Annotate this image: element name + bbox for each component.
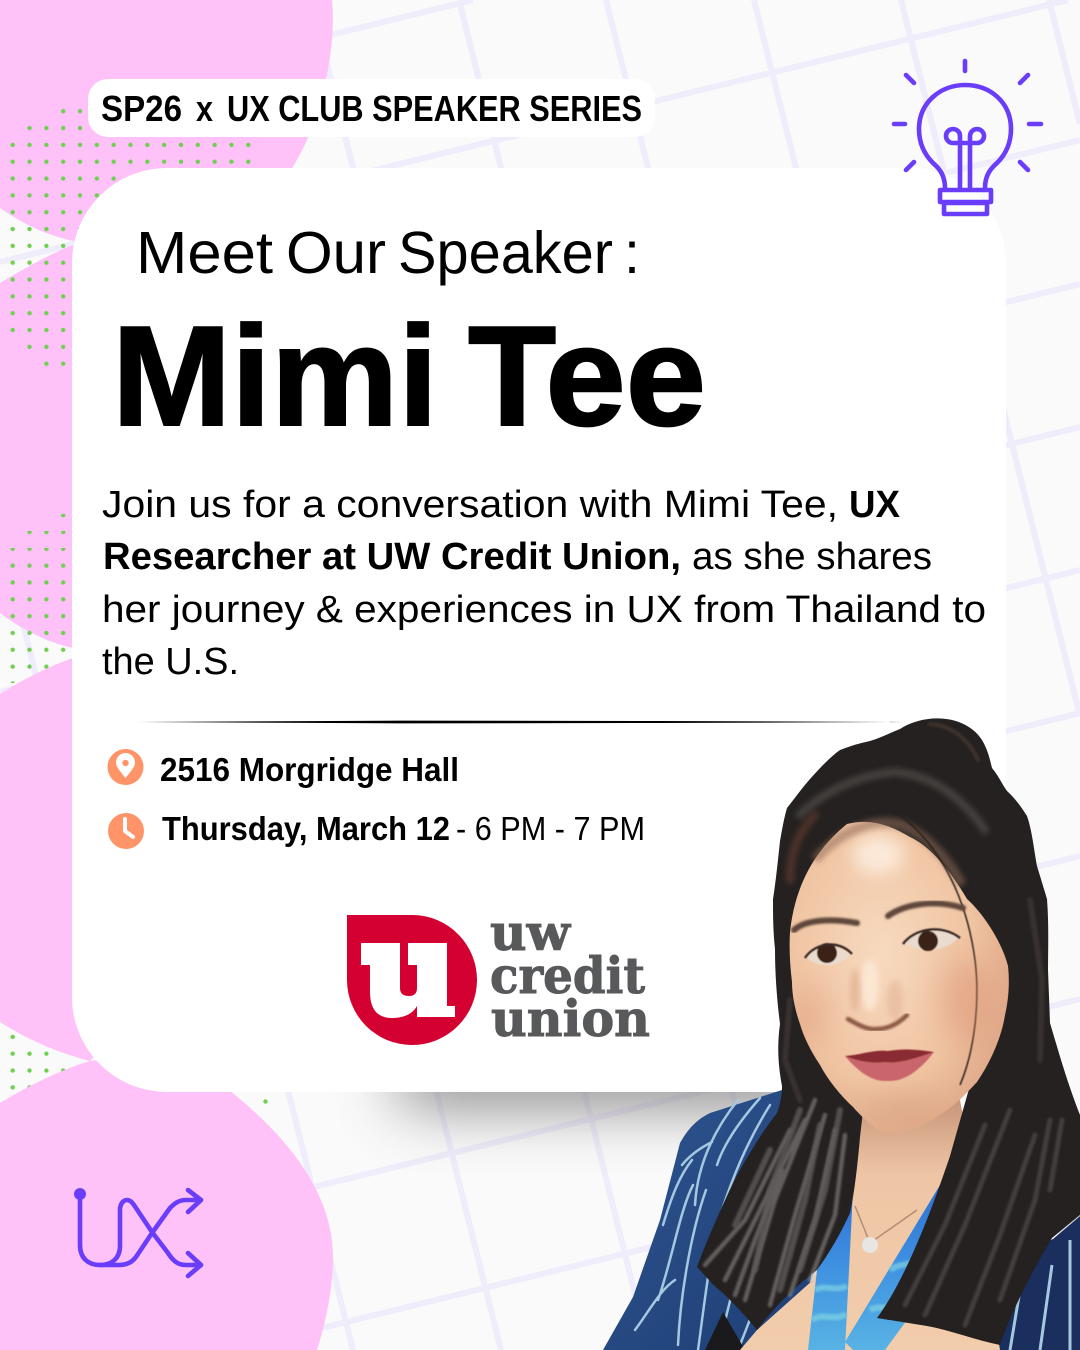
cheeks bbox=[793, 955, 994, 1122]
eyes bbox=[805, 929, 960, 965]
face strand bbox=[895, 812, 977, 1085]
jacket right bbox=[925, 1216, 1080, 1350]
pink blob: bottom left bbox=[0, 1055, 333, 1350]
series pill: x bbox=[196, 88, 213, 129]
nose bbox=[848, 959, 907, 1029]
intro paragraph: as she shares bbox=[692, 536, 932, 578]
date and time text: - 6 PM - 7 PM bbox=[456, 810, 645, 847]
photo: speaker portrait bbox=[603, 718, 1080, 1350]
intro paragraph: Researcher at UW Credit Union, bbox=[103, 536, 681, 578]
necklace bbox=[855, 1206, 917, 1253]
icon: light bulb bbox=[894, 61, 1041, 214]
pink blob: left lower bbox=[0, 658, 150, 1061]
logo: uw credit union: uw bbox=[490, 903, 572, 962]
eyebrows bbox=[794, 903, 963, 930]
scarf bbox=[808, 1185, 958, 1350]
pink blob: top left bbox=[0, 0, 333, 241]
face bbox=[790, 822, 1009, 1134]
heading: meet our speaker bbox=[136, 220, 640, 286]
icon: location pin bbox=[108, 749, 144, 785]
black top bbox=[705, 1312, 745, 1350]
jacket left bbox=[603, 1090, 830, 1350]
lips bbox=[845, 1049, 934, 1081]
logo: uw credit union: credit bbox=[490, 946, 645, 1005]
white main card bbox=[72, 168, 1006, 1092]
heading: speaker name: Mimi bbox=[112, 297, 438, 456]
logo: uw credit union: union bbox=[491, 989, 650, 1048]
heading: speaker name bbox=[112, 297, 706, 456]
neck and chest bbox=[740, 1100, 1000, 1350]
heading: meet our speaker: : bbox=[624, 220, 640, 286]
pink blob: left middle bbox=[0, 245, 120, 648]
intro paragraph: her journey & experiences in UX from Thailand to bbox=[102, 589, 986, 631]
intro paragraph bbox=[102, 484, 986, 683]
icon: UX club logo bbox=[74, 1188, 201, 1276]
date and time text bbox=[162, 810, 645, 847]
series pill: UX CLUB SPEAKER SERIES bbox=[227, 88, 642, 129]
card shadow bbox=[400, 1040, 810, 1104]
series pill: SP26 bbox=[101, 88, 182, 129]
dot pattern: upper cluster bbox=[4, 104, 254, 372]
date and time text: Thursday, March 12 bbox=[162, 810, 450, 847]
hair highlights bbox=[705, 724, 1062, 1325]
dot pattern: middle cluster bbox=[4, 514, 72, 683]
series pill bbox=[88, 79, 655, 137]
heading: meet our speaker: Meet bbox=[136, 220, 273, 286]
hair back bbox=[697, 718, 1080, 1345]
intro paragraph: the U.S. bbox=[102, 641, 239, 683]
icon: clock bbox=[108, 813, 144, 849]
heading: speaker name: Tee bbox=[468, 297, 706, 456]
logo: uw credit union bbox=[347, 903, 650, 1048]
intro paragraph: UX bbox=[849, 484, 901, 526]
dot pattern: lower cluster bbox=[4, 1026, 268, 1104]
heading: meet our speaker: Our bbox=[286, 220, 386, 286]
intro paragraph: Join us for a conversation with Mimi Tee, bbox=[102, 484, 838, 526]
location text: 2516 Morgridge Hall bbox=[160, 751, 459, 788]
hairline shadow bbox=[815, 822, 962, 885]
heading: meet our speaker: Speaker bbox=[398, 220, 613, 286]
forehead highlight bbox=[852, 835, 904, 875]
